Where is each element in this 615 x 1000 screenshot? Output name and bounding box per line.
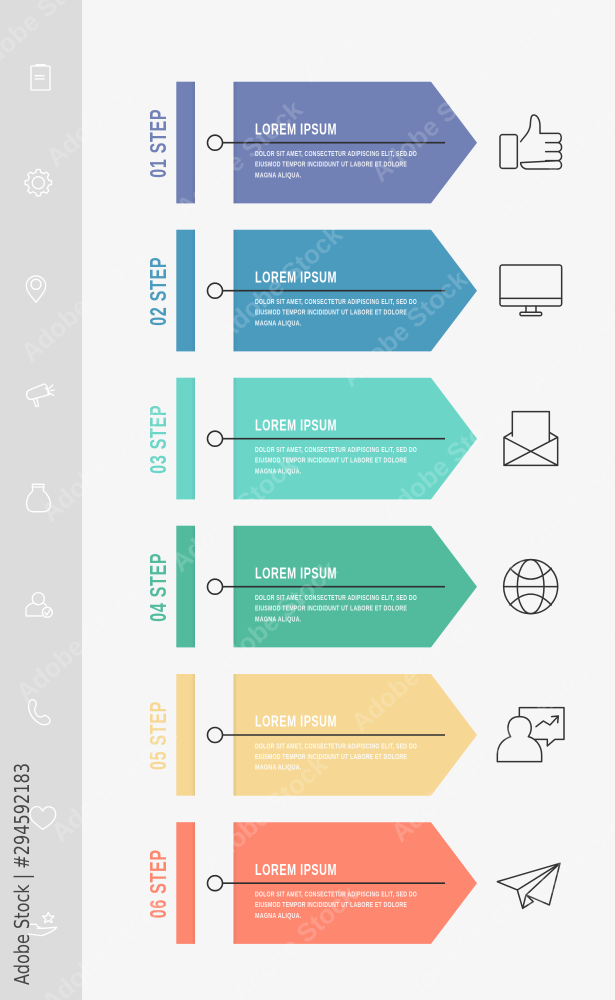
icon: monitor [500, 265, 562, 316]
step 02 label: 02 STEP [145, 257, 171, 326]
step 05 connector [208, 728, 445, 742]
icon: open envelope [504, 412, 558, 465]
step 02 text: DOLOR SIT AMET, CONSECTETUR ADIPISCING ELIT, SED DO [255, 297, 417, 306]
step 01 text [255, 149, 417, 179]
icon: money bag [27, 484, 50, 512]
stock watermarks: Adobe Stock [375, 399, 513, 528]
icon: phone [29, 700, 50, 725]
panel: step 06 [145, 822, 560, 944]
stock watermarks: Adobe Stock [170, 94, 308, 223]
step 03 label: 03 STEP [145, 405, 171, 474]
step 05 arrow [234, 674, 477, 796]
panel: step 03 [145, 378, 558, 499]
stock watermarks: Adobe Stock [335, 264, 473, 393]
step 06 bar [176, 822, 195, 944]
step 05 label: 05 STEP [145, 701, 171, 770]
icon: thumbs up [500, 115, 562, 169]
panel: step 04 [145, 526, 558, 647]
step 05 text: MAGNA ALIQUA. [255, 763, 302, 772]
step 04 text: EIUSMOD TEMPOR INCIDIDUNT UT LABORE ET DOLORE [255, 604, 407, 613]
step 01 text: EIUSMOD TEMPOR INCIDIDUNT UT LABORE ET DOLORE [255, 160, 407, 169]
step 03 text: DOLOR SIT AMET, CONSECTETUR ADIPISCING ELIT, SED DO [255, 445, 417, 454]
icon: megaphone [27, 384, 54, 407]
step 04 heading: LOREM IPSUM [255, 565, 337, 582]
icon: map pin [26, 276, 46, 302]
stock watermarks: Adobe Stock [365, 59, 503, 188]
panel: step 01 [145, 82, 562, 203]
step 02 heading: LOREM IPSUM [255, 269, 337, 286]
step 06 text: MAGNA ALIQUA. [255, 911, 302, 920]
step 01 text: DOLOR SIT AMET, CONSECTETUR ADIPISCING ELIT, SED DO [255, 149, 417, 158]
step 05 heading: LOREM IPSUM [255, 714, 337, 731]
panel: left sidebar [0, 0, 82, 1000]
step 04 arrow [234, 526, 477, 647]
stock watermarks: Adobe Stock [385, 719, 523, 848]
step 06 connector [208, 876, 445, 891]
step 04 text [255, 593, 417, 623]
step 01 text: MAGNA ALIQUA. [255, 170, 302, 179]
step 06 label: 06 STEP [145, 849, 171, 918]
step 01 connector [208, 135, 445, 150]
panel: step 02 [145, 230, 562, 351]
step 02 bar [176, 230, 195, 351]
panel: step 05 [145, 674, 564, 796]
step 05 bar [176, 674, 195, 796]
step 02 connector [208, 283, 445, 298]
step 06 arrow [234, 822, 477, 944]
step 01 heading: LOREM IPSUM [255, 121, 337, 138]
watermark id: Adobe Stock | #294592183 [10, 763, 34, 985]
step 06 text: DOLOR SIT AMET, CONSECTETUR ADIPISCING ELIT, SED DO [255, 890, 417, 898]
step 03 arrow [234, 378, 477, 499]
step 01 arrow [234, 82, 477, 203]
icon: clipboard [31, 65, 50, 90]
step 03 bar [176, 378, 195, 499]
step 04 connector [208, 579, 445, 594]
step 01 bar [176, 82, 195, 203]
stock watermarks: Adobe Stock [165, 449, 303, 578]
step 03 connector [208, 431, 445, 446]
step 01 label: 01 STEP [145, 109, 171, 178]
step 03 text: EIUSMOD TEMPOR INCIDIDUNT UT LABORE ET DOLORE [255, 456, 407, 465]
step 03 text: MAGNA ALIQUA. [255, 466, 302, 475]
stock watermarks: Adobe Stock [205, 554, 343, 683]
step 04 bar [176, 526, 195, 647]
icon: heart [30, 807, 56, 829]
stock watermarks: Adobe Stock [345, 609, 483, 738]
stock watermarks: Adobe Stock [195, 749, 333, 878]
icon: globe [504, 560, 558, 614]
icon: person with chart bubble [497, 708, 564, 762]
step 02 text [255, 297, 417, 327]
icon: verified user [26, 593, 52, 617]
step 06 text [255, 890, 417, 920]
step 04 label: 04 STEP [145, 553, 171, 622]
step 05 text: DOLOR SIT AMET, CONSECTETUR ADIPISCING ELIT, SED DO [255, 741, 417, 750]
step 02 arrow [234, 230, 477, 351]
stock watermarks: Adobe Stock [15, 239, 153, 368]
icon: gear [25, 169, 52, 196]
stock watermarks: Adobe Stock [40, 44, 178, 173]
step 06 heading: LOREM IPSUM [255, 862, 337, 879]
step 02 text: MAGNA ALIQUA. [255, 318, 302, 327]
step 06 text: EIUSMOD TEMPOR INCIDIDUNT UT LABORE ET DOLORE [255, 900, 407, 909]
step 05 text [255, 741, 417, 772]
stock watermarks: Adobe Stock [45, 719, 183, 848]
stock watermarks: Adobe Stock [210, 219, 348, 348]
step 04 text: DOLOR SIT AMET, CONSECTETUR ADIPISCING ELIT, SED DO [255, 593, 417, 602]
stock watermarks: Adobe Stock [35, 399, 173, 528]
icon: hand with star [28, 912, 57, 936]
step 03 text [255, 445, 417, 475]
stock watermarks: Adobe Stock [10, 579, 148, 708]
step 03 heading: LOREM IPSUM [255, 417, 337, 434]
icon: paper plane [497, 863, 560, 908]
step 02 text: EIUSMOD TEMPOR INCIDIDUNT UT LABORE ET DOLORE [255, 308, 407, 317]
step 04 text: MAGNA ALIQUA. [255, 614, 302, 623]
step 05 text: EIUSMOD TEMPOR INCIDIDUNT UT LABORE ET DOLORE [255, 752, 407, 761]
